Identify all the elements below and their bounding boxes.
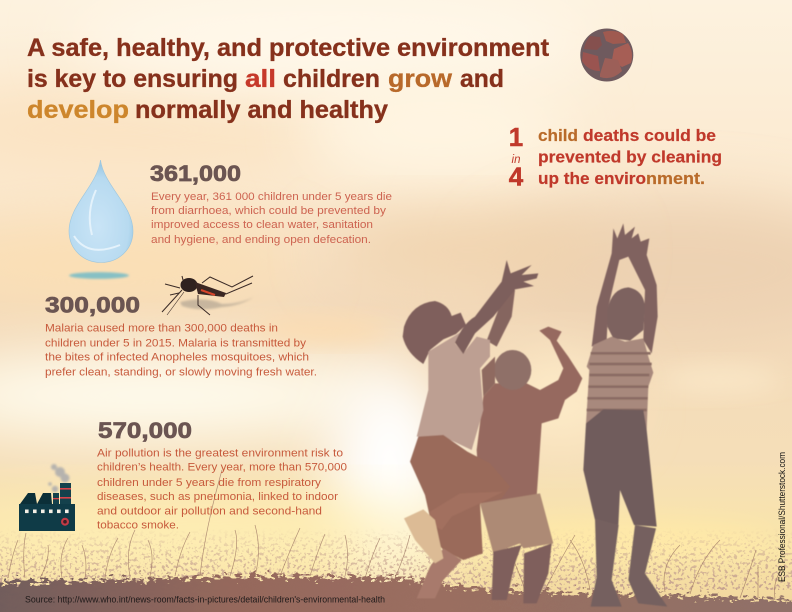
stat: 361,000: Every year, 361 000 children under 5 years die bbox=[151, 191, 392, 203]
stat: 570,000: Air pollution is the greatest environment risk to bbox=[97, 448, 343, 460]
stat: 300,000: 300,000 bbox=[45, 293, 140, 318]
callout: 1 in 4: child bbox=[538, 127, 578, 145]
callout: 1 in 4: 1 bbox=[509, 122, 523, 152]
child: left bbox=[403, 260, 538, 598]
photo: three children jumping bbox=[403, 223, 667, 607]
callout: 1 in 4: in bbox=[512, 154, 520, 166]
stat: 361,000: from diarrhoea, which could be prevented by bbox=[151, 205, 386, 217]
title: normally and healthy bbox=[135, 96, 388, 124]
source line: Source: http://www.who.int/news-room/facts-in-pictures/detail/children's-environmental-health bbox=[25, 595, 385, 605]
child: right bbox=[583, 223, 667, 607]
stat: 300,000: Malaria caused more than 300,000 deaths in bbox=[45, 323, 278, 335]
stat: 570,000 bbox=[97, 418, 347, 532]
title bbox=[27, 34, 550, 124]
stat: 361,000 bbox=[150, 161, 392, 246]
callout: 1 in 4: deaths could be bbox=[583, 127, 716, 145]
stat: 300,000: prefer clean, standing, or slowly moving fresh water. bbox=[45, 366, 317, 378]
stat: 570,000: 570,000 bbox=[98, 418, 192, 443]
title: grow bbox=[388, 65, 453, 93]
photo credit: ESB Professional/Shutterstock.com bbox=[777, 452, 787, 582]
stat: 570,000: tobacco smoke. bbox=[97, 520, 179, 532]
callout: 1 in 4: 4 bbox=[509, 162, 524, 192]
stat: 300,000: children under 5 in 2015. Malaria is transmitted by bbox=[45, 338, 306, 350]
stat: 300,000 bbox=[45, 293, 317, 378]
stat: 570,000: children under 5 years die from respiratory bbox=[97, 477, 321, 489]
icon: mosquito bbox=[162, 276, 254, 315]
icon: factory bbox=[19, 464, 75, 531]
stat: 570,000: children’s health. Every year, more than 570,000 bbox=[97, 462, 347, 474]
stat: 361,000: 361,000 bbox=[150, 161, 241, 186]
title: all bbox=[245, 65, 276, 93]
stat: 570,000: and outdoor air pollution and second-hand bbox=[97, 505, 322, 517]
stat: 361,000: improved access to clean water, sanitation bbox=[151, 219, 373, 231]
title: develop bbox=[27, 96, 129, 124]
title: is key to ensuring bbox=[27, 65, 238, 93]
title: children bbox=[283, 65, 380, 93]
callout: 1 in 4 bbox=[509, 122, 722, 192]
callout: 1 in 4: nment. bbox=[646, 170, 705, 188]
soccer ball bbox=[580, 28, 633, 82]
title: A safe, healthy, and protective environment bbox=[27, 34, 550, 62]
stat: 300,000: the bites of infected Anopheles mosquitoes, which bbox=[45, 352, 309, 364]
callout: 1 in 4: prevented by cleaning bbox=[538, 148, 722, 166]
callout: 1 in 4: up the enviro bbox=[538, 170, 646, 188]
stat: 570,000: diseases, such as pneumonia, linked to indoor bbox=[97, 491, 338, 503]
grass and meadow silhouette bbox=[0, 470, 792, 612]
child: middle bbox=[477, 290, 582, 603]
stat: 361,000: and hygiene, and ending open defecation. bbox=[151, 234, 371, 246]
icon: water drop bbox=[69, 160, 133, 279]
title: and bbox=[460, 65, 504, 93]
